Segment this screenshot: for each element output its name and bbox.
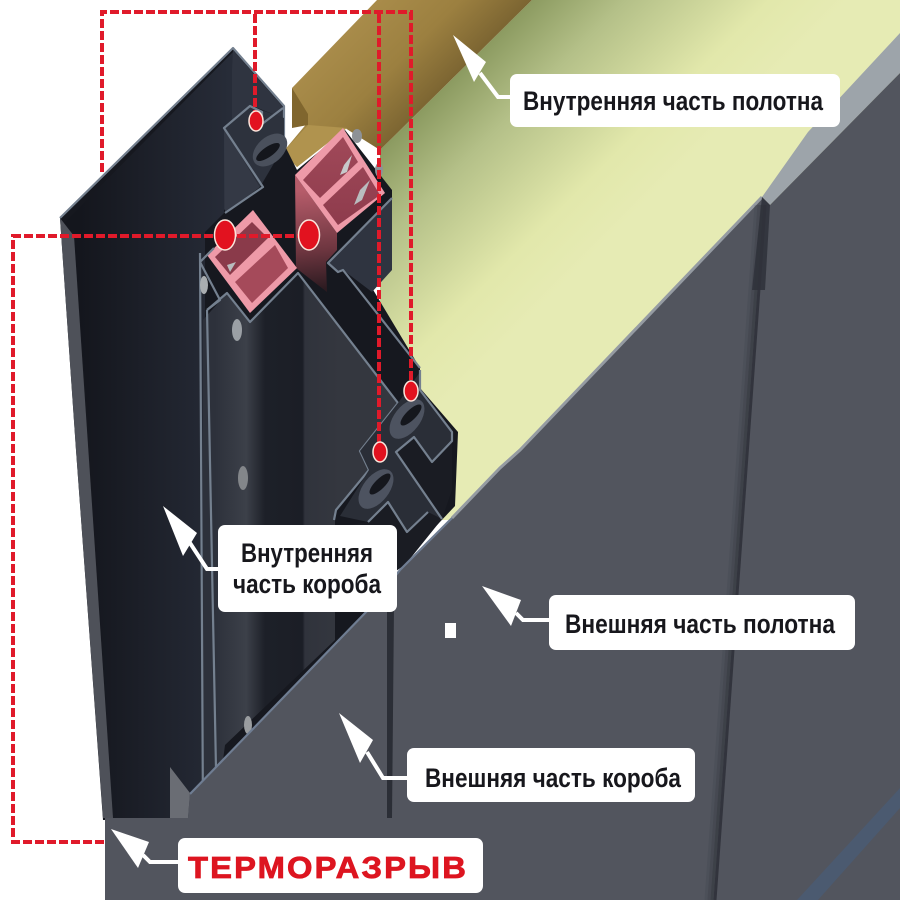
insulation: green inner panel — [380, 0, 900, 520]
red dashed leader lines — [13, 12, 411, 842]
light edge of door leaf — [762, 33, 900, 205]
top clip profile — [224, 106, 294, 213]
arrow: inner box part — [163, 506, 220, 569]
box fold line — [387, 606, 394, 818]
hinge screws — [200, 276, 252, 734]
frame: left flange — [60, 218, 113, 818]
callout: outer door part — [549, 595, 855, 650]
small white square — [445, 623, 456, 638]
upper thermal break: pink polyamide insert — [295, 128, 385, 292]
lower-right blue diagonal strip — [797, 788, 900, 900]
callout: inner box part: Внутренняя — [241, 538, 373, 568]
box edge highlight — [190, 518, 452, 794]
door fold shadow — [706, 197, 770, 900]
right bracket behind upper thermal break — [328, 198, 420, 368]
red marker dots — [214, 111, 418, 462]
callout: thermal break: ТЕРМОРАЗРЫВ — [188, 850, 468, 885]
lower frame profiles — [340, 370, 452, 575]
callout: inner box part: часть короба — [233, 569, 382, 599]
lower thermal break: pink polyamide insert — [200, 210, 297, 313]
callout: outer door part: Внешняя часть полотна — [565, 609, 836, 639]
arrow: inner door part — [453, 35, 512, 97]
arrow: outer door part — [482, 586, 551, 626]
callout: thermal break — [178, 838, 483, 893]
frame: rear face — [60, 48, 284, 820]
door edge highlight — [452, 197, 762, 518]
callout: inner door part — [510, 74, 840, 127]
wooden bar — [283, 0, 532, 167]
door frame silhouette — [60, 48, 458, 820]
callout: outer box part: Внешняя часть короба — [425, 763, 682, 793]
box bottom flange — [170, 767, 190, 818]
callout: inner box part — [218, 525, 397, 612]
callout: inner door part: Внутренняя часть полотна — [523, 86, 824, 116]
arrow: outer box part — [339, 713, 409, 778]
arrow: thermal break — [111, 829, 180, 868]
callout: outer box part — [407, 748, 695, 802]
central profile panel — [200, 253, 398, 820]
